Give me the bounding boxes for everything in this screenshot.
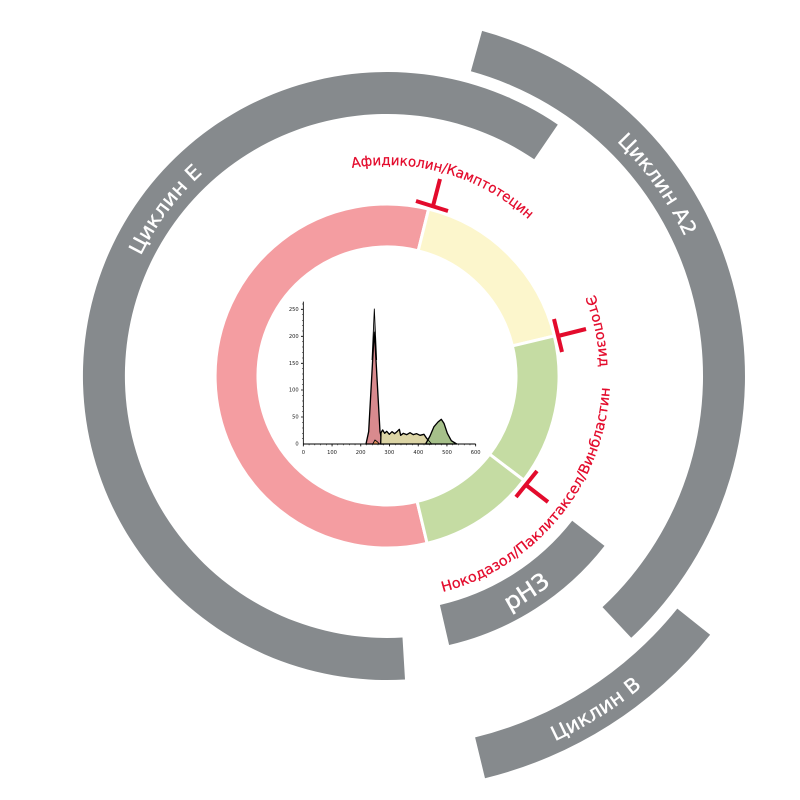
y axis labels: 100 (289, 388, 299, 394)
arc: pH3: pH3 (505, 574, 548, 615)
arc: pH3 (440, 520, 604, 645)
x axis labels: 500 (442, 450, 452, 456)
ring segment: G1 pink (215, 204, 429, 548)
label: nocodazole / paclitaxel / vinblastine: Нокодазол/Паклитаксел/Винбластин (441, 388, 610, 592)
inhibitor marker: etoposide (554, 319, 586, 352)
axes (301, 302, 476, 446)
ring segment: G2 green (490, 336, 559, 480)
x axis labels: 600 (471, 450, 481, 456)
arc: Cyclin A2 (470, 30, 745, 638)
histogram: S phase (381, 429, 432, 444)
histogram: G2 peak (426, 419, 457, 444)
ring segment: M green (417, 454, 524, 543)
inhibitor marker: nocodazole (516, 471, 548, 502)
x axis labels: 400 (413, 450, 423, 456)
histogram: grey spike top (372, 309, 377, 360)
ring segment: S yellow (418, 209, 554, 346)
y axis labels: 150 (289, 361, 299, 367)
x axis labels: 200 (356, 450, 366, 456)
histogram: G1 peak (366, 330, 383, 444)
y axis labels: 50 (292, 415, 299, 421)
arc: Cyclin E: Циклин Е (128, 164, 202, 254)
histogram: S phase tail overlap (424, 434, 432, 444)
arc: Cyclin B (475, 608, 710, 778)
y axis labels: 0 (295, 442, 299, 448)
inhibitor marker: aphidicolin (416, 179, 448, 211)
x axis labels: 300 (384, 450, 394, 456)
x axis labels: 100 (327, 450, 337, 456)
arc: Cyclin A2: Циклин А2 (618, 132, 696, 236)
y axis labels: 200 (289, 334, 299, 340)
y axis labels (289, 307, 299, 448)
x axis labels (302, 450, 481, 456)
arc: Cyclin B: Циклин В (550, 678, 640, 741)
label: etoposide: Этопозид (586, 295, 608, 367)
histogram chart (289, 302, 481, 456)
x axis labels: 0 (302, 450, 305, 456)
y axis labels: 250 (289, 307, 299, 313)
cell cycle ring (215, 204, 559, 548)
histogram: small overlap curves (373, 440, 379, 444)
label: aphidicolin / camptothecin: Афидиколин/Камптотецин (352, 156, 533, 219)
